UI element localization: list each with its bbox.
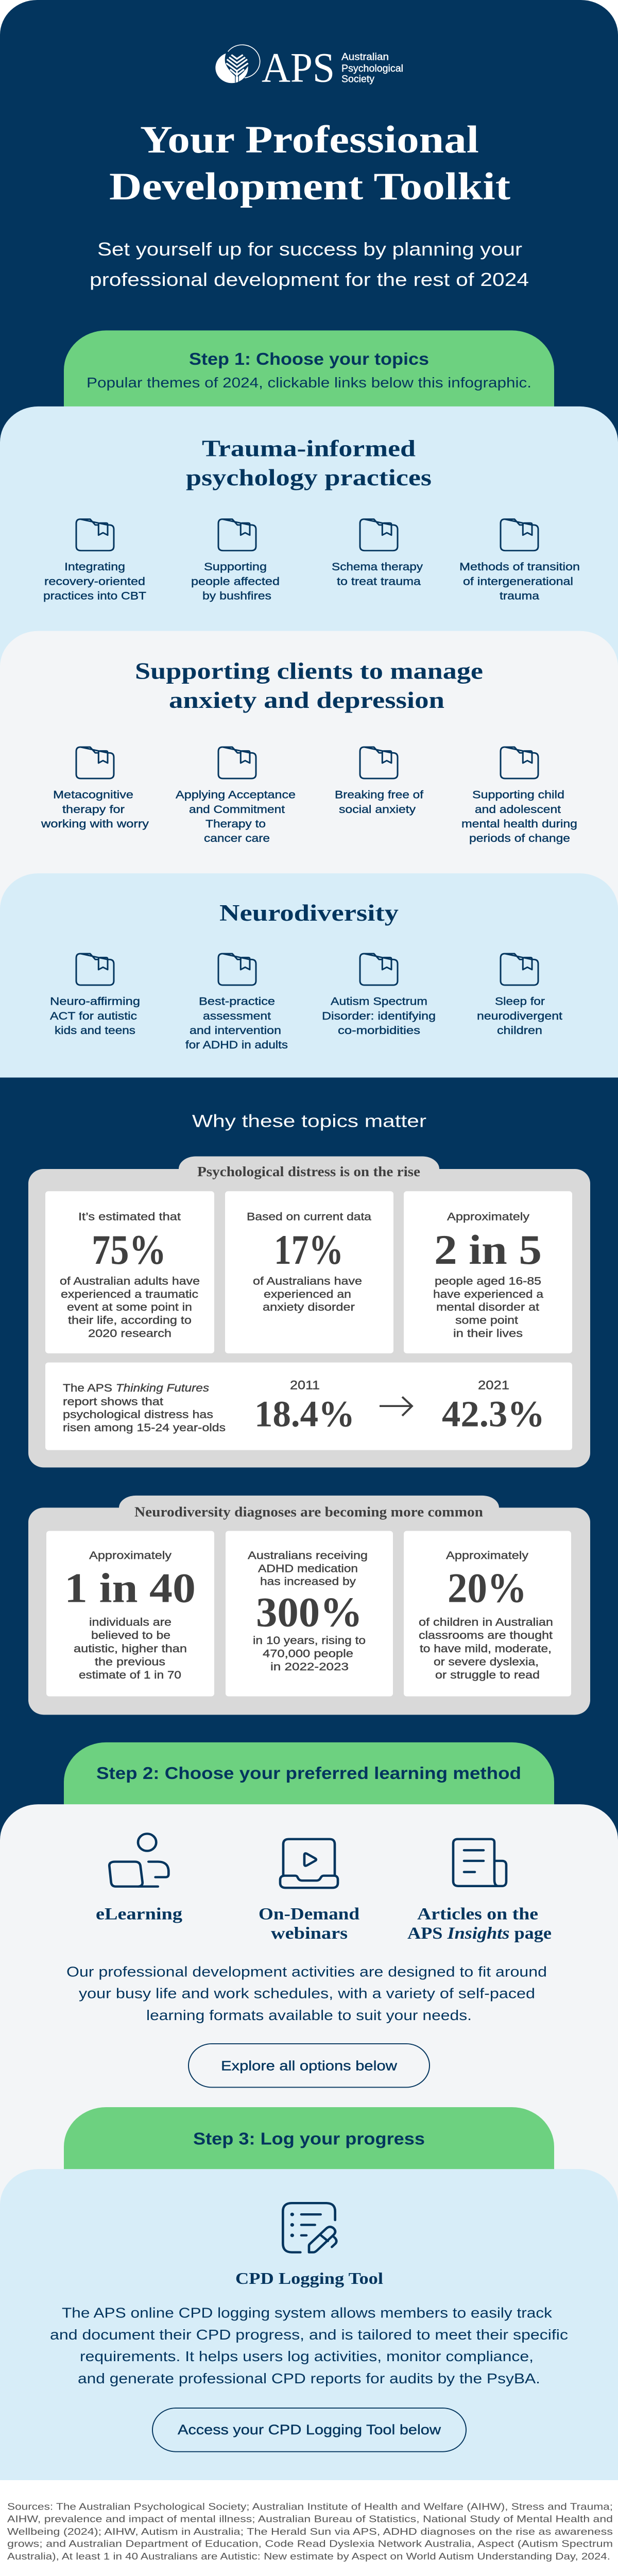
stat card: 2 in 5: mental disorder at <box>436 1301 540 1313</box>
topic: intergenerational trauma <box>459 519 580 602</box>
subtitle: professional development for the rest of 2024 <box>90 269 529 290</box>
panel: neurodiversity <box>0 873 618 1077</box>
stat card: 17%: anxiety disorder <box>263 1301 355 1313</box>
logo: APS: Society <box>341 74 375 84</box>
title: Development Toolkit <box>109 165 510 208</box>
button: explore all options below: Explore all options below <box>221 2058 397 2073</box>
stat card: 1 in 40 <box>46 1531 214 1697</box>
stat card: 2 in 5: Approximately <box>447 1210 530 1223</box>
text block: learning formats: Our professional development activities are designed to fit around <box>66 1964 547 1980</box>
label: eLearning: eLearning <box>96 1905 182 1923</box>
label: on-demand webinars: On-Demand <box>259 1905 359 1923</box>
topic: ADHD assessment and intervention: for ADHD in adults <box>185 1039 288 1051</box>
topic: neuro-affirming ACT: ACT for autistic <box>50 1009 137 1022</box>
topic: sleep for neurodivergent children: neurodivergent <box>477 1009 563 1022</box>
button: access your CPD logging tool below <box>152 2408 466 2452</box>
topic: sleep for neurodivergent children <box>477 954 563 1037</box>
stat card: 17%: Based on current data <box>247 1210 372 1223</box>
stat card: 300%: has increased by <box>260 1575 356 1587</box>
button: explore all options below <box>188 2044 430 2087</box>
text block: CPD logging description: The APS online CPD logging system allows members to easily track <box>62 2305 552 2321</box>
stat card: 75%: 2020 research <box>88 1327 171 1340</box>
topic: autism spectrum co-morbidities <box>322 954 436 1037</box>
title: Your Professional <box>140 118 479 161</box>
topic: metacognitive therapy: Metacognitive <box>53 788 133 801</box>
stat card: 300%: 470,000 people <box>263 1647 353 1659</box>
sources: Australia), At least 1 in 40 Australians are Autistic: New estimate by Aspect on World Autism Understanding Day, 2024. <box>7 2551 610 2562</box>
topic: ADHD assessment and intervention: assessment <box>203 1009 271 1022</box>
topic: ADHD assessment and intervention <box>185 954 288 1051</box>
label: on-demand webinars <box>259 1905 359 1943</box>
stat card: 75%: It’s estimated that <box>78 1210 181 1223</box>
heading: anxiety and depression: Supporting clients to manage <box>135 659 483 684</box>
topic: metacognitive therapy: working with worry <box>41 818 149 830</box>
stat card: 1 in 40: individuals are <box>89 1616 171 1628</box>
stat card: 300%: in 2022-2023 <box>270 1660 349 1673</box>
description: thinking futures report: psychological distress has <box>63 1408 213 1420</box>
topic: child and adolescent mental health: Supporting child <box>472 788 564 801</box>
stat card: 17% <box>225 1191 393 1353</box>
stat card: 1 in 40: Approximately <box>89 1549 172 1562</box>
stat card: 75%: experienced a traumatic <box>61 1287 198 1300</box>
stat card: 20% <box>404 1531 571 1697</box>
description: thinking futures report: report shows that <box>63 1395 164 1408</box>
topic: integrating recovery-oriented practices: Integrating <box>64 561 125 573</box>
topic: intergenerational trauma: of intergenerational <box>463 575 573 587</box>
topic: intergenerational trauma: trauma <box>500 589 540 602</box>
text block: learning formats: learning formats available to suit your needs. <box>146 2008 472 2024</box>
stat card: 17%: 17% <box>274 1227 344 1273</box>
stat card: 17%: experienced an <box>264 1287 351 1300</box>
topic: autism spectrum co-morbidities: co-morbidities <box>338 1024 420 1037</box>
heading: trauma-informed: psychology practices <box>186 465 432 491</box>
background: navy header and statistics section <box>0 0 618 1841</box>
heading: anxiety and depression: anxiety and depression <box>169 688 444 714</box>
topic: supporting people affected by bushfires <box>191 519 280 602</box>
heading: why these topics matter: Why these topics matter <box>192 1111 426 1131</box>
topic: supporting people affected by bushfires: people affected <box>191 575 280 587</box>
icon: eLearning <box>109 1834 168 1887</box>
topic: integrating recovery-oriented practices <box>43 519 146 602</box>
topic: social anxiety: social anxiety <box>339 803 416 816</box>
text block: CPD logging description: and generate professional CPD reports for audits by the PsyBA. <box>78 2371 540 2387</box>
label: articles on the APS Insights page <box>407 1905 552 1943</box>
topic: supporting people affected by bushfires: Supporting <box>204 561 267 573</box>
topic: integrating recovery-oriented practices: practices into CBT <box>43 589 146 602</box>
text block: CPD logging description <box>50 2305 568 2387</box>
stat card: 75%: their life, according to <box>68 1314 192 1326</box>
sources <box>7 2501 613 2562</box>
panel: neurodiversity diagnoses <box>28 1496 590 1715</box>
icon: CPD log <box>283 2203 336 2252</box>
topic: intergenerational trauma: Methods of transition <box>459 561 580 573</box>
stat card: 75%: of Australian adults have <box>60 1275 200 1287</box>
text block: learning formats: your busy life and work schedules, with a variety of self-paced <box>79 1986 535 2002</box>
stat card: 75% <box>45 1191 214 1353</box>
topic: acceptance and commitment therapy: Therapy to <box>205 818 266 830</box>
arrow <box>380 1397 412 1416</box>
stat card: 2 in 5: some point <box>455 1314 519 1326</box>
label: on-demand webinars: webinars <box>271 1924 348 1943</box>
topic: sleep for neurodivergent children: children <box>497 1024 542 1037</box>
topic: schema therapy <box>332 519 423 587</box>
step 1 heading: Step 1: Choose your topics <box>189 350 429 369</box>
text block: learning formats <box>66 1964 547 2024</box>
stat: 2021 42.3%: 2021 <box>478 1378 509 1392</box>
sources: AIHW, prevalence and impact of mental illness; Australian Bureau of Statistics, National Study of Mental Health and <box>7 2514 613 2525</box>
logo: APS: Psychological <box>341 63 403 74</box>
stat card: 300%: in 10 years, rising to <box>253 1634 366 1647</box>
topic: autism spectrum co-morbidities: Disorder: identifying <box>322 1009 436 1022</box>
stat card: 300%: 300% <box>256 1589 363 1636</box>
stat card: 1 in 40: believed to be <box>91 1629 170 1641</box>
stat card: 2 in 5: people aged 16-85 <box>435 1275 541 1287</box>
stat card: 2 in 5: have experienced a <box>433 1287 544 1300</box>
sources: Sources: The Australian Psychological Society; Australian Institute of Health and Welfare (AIHW), Stress and Trauma; <box>7 2501 613 2512</box>
topic: metacognitive therapy: therapy for <box>62 803 125 816</box>
topic: ADHD assessment and intervention: and intervention <box>190 1024 281 1037</box>
description: thinking futures report: The APS Thinking Futures <box>63 1382 209 1394</box>
logo: APS: APS <box>262 45 335 91</box>
stat card: 1 in 40: autistic, higher than <box>74 1642 187 1655</box>
stat card: 300%: ADHD medication <box>258 1562 358 1574</box>
stat card: 18.4% to 42.3% <box>45 1363 572 1450</box>
icon: article <box>453 1839 506 1886</box>
stat card: 20%: classrooms are thought <box>419 1629 553 1641</box>
stat: 2011 18.4% <box>254 1378 355 1435</box>
stat: 2011 18.4%: 18.4% <box>254 1394 355 1435</box>
step 1 description: Popular themes of 2024, clickable links below this infographic. <box>87 375 531 391</box>
sources: grows; and Australian Department of Education, Code Read Dyslexia Network Australia, Aspect (Autism Spectrum <box>7 2538 613 2549</box>
label: articles on the APS Insights page: APS Insights page <box>407 1924 552 1943</box>
heading: trauma-informed <box>186 436 432 491</box>
topic: acceptance and commitment therapy: and Commitment <box>189 803 285 816</box>
stat card: 20%: Approximately <box>446 1549 529 1562</box>
stat card: 300% <box>226 1531 393 1697</box>
panel: CPD logging tool <box>0 2169 618 2480</box>
stat: 2021 42.3%: 42.3% <box>442 1394 545 1435</box>
topic: integrating recovery-oriented practices: recovery-oriented <box>44 575 145 587</box>
topic: supporting people affected by bushfires: by bushfires <box>202 589 271 602</box>
topic: metacognitive therapy <box>41 747 149 830</box>
topic: acceptance and commitment therapy: cancer care <box>204 832 270 844</box>
topic: social anxiety: Breaking free of <box>335 788 424 801</box>
topic: child and adolescent mental health <box>461 747 577 844</box>
topic: child and adolescent mental health: and adolescent <box>475 803 561 816</box>
heading: anxiety and depression <box>135 659 483 714</box>
stat card: 20%: 20% <box>448 1565 527 1612</box>
stat card: 2 in 5 <box>404 1191 572 1353</box>
stat: 2011 18.4%: 2011 <box>290 1378 320 1392</box>
stat card: 1 in 40: estimate of 1 in 70 <box>79 1669 181 1681</box>
stat card: 1 in 40: 1 in 40 <box>64 1565 196 1612</box>
topic: acceptance and commitment therapy <box>176 747 296 844</box>
description: thinking futures report <box>63 1382 226 1434</box>
panel: supporting clients with anxiety and depression <box>0 631 618 910</box>
stat card: 2 in 5: 2 in 5 <box>434 1227 542 1273</box>
step 1 tab <box>64 330 554 407</box>
logo: APS <box>215 45 403 91</box>
topic: acceptance and commitment therapy: Applying Acceptance <box>176 788 296 801</box>
title <box>109 118 510 208</box>
logo: APS: Australian <box>341 52 389 62</box>
step 3 heading: Step 3: Log your progress <box>193 2129 425 2148</box>
stat card: 17%: of Australians have <box>253 1275 362 1287</box>
topic: neuro-affirming ACT: kids and teens <box>55 1024 135 1037</box>
stat card: 20%: or severe dyslexia, <box>434 1655 539 1668</box>
topic: schema therapy: Schema therapy <box>332 561 423 573</box>
topic: child and adolescent mental health: periods of change <box>469 832 570 844</box>
heading: CPD logging tool: CPD Logging Tool <box>235 2270 383 2288</box>
stat card: 75%: 75% <box>92 1227 166 1273</box>
stat card: 75%: event at some point in <box>67 1301 192 1313</box>
label: articles on the APS Insights page: Articles on the <box>417 1905 538 1923</box>
subtitle <box>90 239 529 290</box>
step 3 tab <box>64 2107 554 2170</box>
panel: trauma-informed psychology practices <box>0 406 618 677</box>
topic: neuro-affirming ACT <box>50 954 140 1037</box>
button: access your CPD logging tool below: Access your CPD Logging Tool below <box>178 2422 441 2437</box>
panel: psychological distress <box>28 1157 590 1467</box>
stat card: 1 in 40: the previous <box>95 1655 165 1668</box>
subtitle: Set yourself up for success by planning your <box>97 239 522 260</box>
heading: neurodiversity: Neurodiversity <box>219 901 399 926</box>
topic: ADHD assessment and intervention: Best-practice <box>199 995 275 1007</box>
icon: on-demand webinar <box>280 1839 338 1888</box>
tab title: psychological distress is on the rise: Psychological distress is on the rise <box>197 1164 420 1180</box>
text block: CPD logging description: requirements. It helps users log activities, monitor compliance, <box>80 2349 534 2365</box>
description: thinking futures report: risen among 15-24 year-olds <box>63 1421 226 1434</box>
topic: social anxiety <box>335 747 424 816</box>
topic: autism spectrum co-morbidities: Autism Spectrum <box>331 995 427 1007</box>
tab title: neurodiversity diagnoses are becoming more common: Neurodiversity diagnoses are becoming more common <box>134 1504 483 1520</box>
sources: Wellbeing (2024); AIHW, Autism in Australia; The Herald Sun via APS, ADHD diagnoses on the rise as awareness <box>7 2527 613 2537</box>
stat card: 20%: to have mild, moderate, <box>420 1642 552 1655</box>
topic: sleep for neurodivergent children: Sleep for <box>495 995 545 1007</box>
panel: learning methods <box>0 1804 618 2206</box>
stat card: 2 in 5: in their lives <box>453 1327 523 1340</box>
topic: child and adolescent mental health: mental health during <box>461 818 577 830</box>
step 2 tab <box>64 1742 554 1805</box>
text block: CPD logging description: and document their CPD progress, and is tailored to meet their specific <box>50 2327 568 2343</box>
stat card: 20%: or struggle to read <box>435 1669 540 1681</box>
topic: schema therapy: to treat trauma <box>337 575 421 587</box>
topic: neuro-affirming ACT: Neuro-affirming <box>50 995 140 1007</box>
heading: trauma-informed: Trauma-informed <box>202 436 416 462</box>
stat card: 20%: of children in Australian <box>419 1616 553 1628</box>
step 2 heading: Step 2: Choose your preferred learning method <box>96 1764 521 1783</box>
stat card: 300%: Australians receiving <box>248 1549 368 1562</box>
